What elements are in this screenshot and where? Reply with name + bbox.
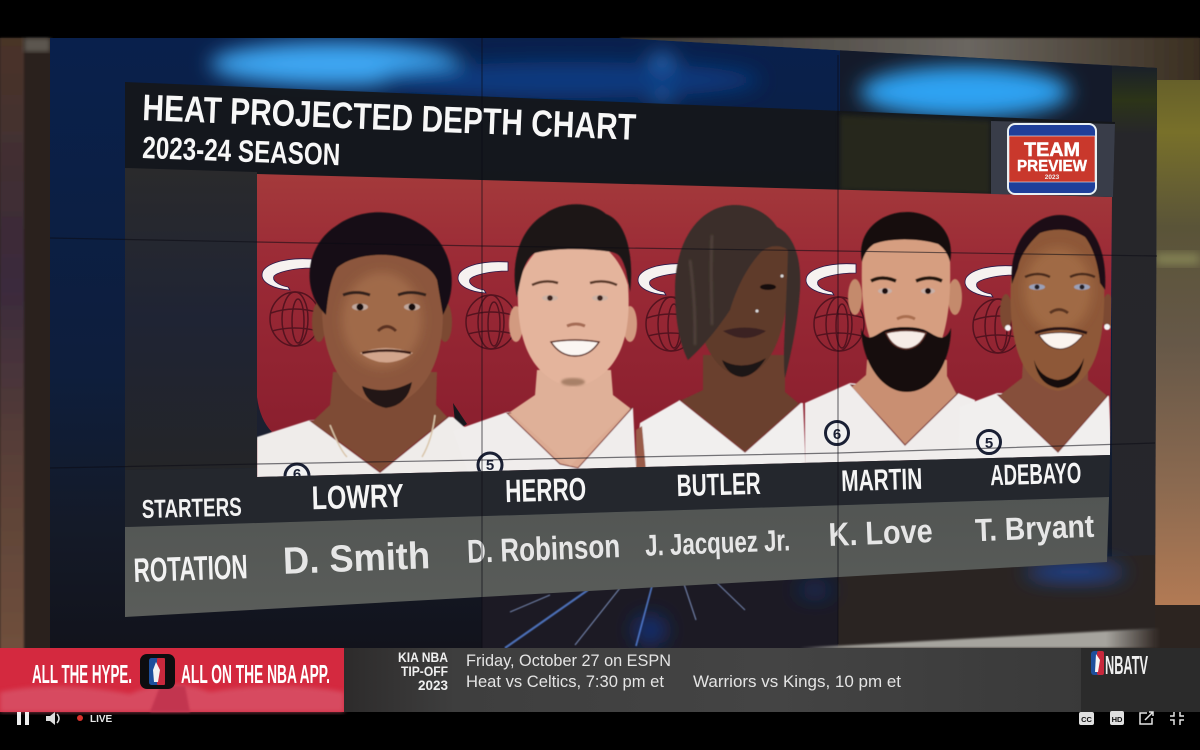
starters band <box>125 455 1110 527</box>
ticker text: Friday, October 27 on ESPN <box>466 651 671 670</box>
icon: pause <box>17 712 29 725</box>
ticker label: 2023 <box>418 677 448 693</box>
left label column <box>125 168 257 470</box>
icon: pop out <box>1140 712 1153 724</box>
badge: team preview <box>991 121 1115 197</box>
row labels <box>133 492 248 590</box>
ticker bar: NBATV <box>1105 650 1148 680</box>
video wall screen <box>50 38 1158 648</box>
ticker label: TIP-OFF <box>401 663 448 679</box>
starter names: BUTLER <box>676 466 761 503</box>
jersey numbers: 5 <box>486 457 494 474</box>
stage lights <box>210 42 1125 644</box>
player: Butler <box>634 205 806 470</box>
row labels: ROTATION <box>133 548 248 590</box>
title: HEAT PROJECTED DEPTH CHART <box>142 87 637 148</box>
floor panels <box>483 578 838 648</box>
jersey numbers <box>284 420 1002 476</box>
jersey numbers: 5 <box>985 435 993 452</box>
starter names <box>311 458 1082 516</box>
live indicator <box>77 714 113 725</box>
player: Martin <box>805 212 975 470</box>
screen seams <box>50 38 1157 648</box>
ticker label <box>398 649 448 693</box>
icon: closed captions: CC <box>1081 715 1092 724</box>
jersey numbers: 6 <box>833 426 841 443</box>
title: 2023-24 SEASON <box>142 130 341 172</box>
rotation names: J. Jacquez Jr. <box>645 524 791 563</box>
header band <box>125 82 1115 197</box>
NBA TV logo <box>1091 650 1148 680</box>
right edge strip <box>1112 60 1158 635</box>
badge: team preview: 2023 <box>1045 174 1060 181</box>
jersey numbers: 6 <box>293 466 301 483</box>
wall highlight under screen <box>800 628 1160 648</box>
player: Herro <box>453 204 637 478</box>
starter names: ADEBAYO <box>990 458 1082 492</box>
panel: depth chart graphic <box>50 38 1157 648</box>
player controls <box>17 711 1184 725</box>
ad banner: NBA app: ALL ON THE NBA APP. <box>181 659 330 689</box>
ad banner: NBA app <box>0 648 344 712</box>
floor rays <box>505 582 745 648</box>
player: Lowry <box>257 212 490 480</box>
ticker text: Heat vs Celtics, 7:30 pm et <box>466 672 664 691</box>
ticker text <box>466 651 901 691</box>
rotation names: K. Love <box>828 512 933 553</box>
rotation names: D. Smith <box>282 535 431 583</box>
ad banner: NBA app: ALL THE HYPE. <box>32 659 132 689</box>
heat logos <box>262 259 1023 353</box>
icon: HD <box>1110 711 1124 725</box>
rotation names: T. Bryant <box>974 508 1095 548</box>
starter names: HERRO <box>505 471 587 509</box>
icon: exit fullscreen <box>1170 712 1184 725</box>
starter names: LOWRY <box>311 477 404 516</box>
icon: closed captions <box>1079 712 1094 725</box>
row labels: STARTERS <box>141 492 242 524</box>
top right dark zone <box>840 50 1157 130</box>
icon: NBA app <box>140 654 175 689</box>
player: Adebayo <box>958 215 1114 470</box>
title <box>142 87 637 172</box>
icon: volume <box>46 712 59 725</box>
player photos <box>257 204 1114 488</box>
rotation names <box>282 508 1095 583</box>
rotation band <box>125 497 1109 617</box>
badge: team preview: TEAM <box>1024 140 1080 161</box>
photo corner shadows <box>257 397 272 440</box>
ticker bar <box>344 648 1200 712</box>
ticker label: KIA NBA <box>398 649 448 665</box>
live indicator: LIVE <box>90 714 113 725</box>
hair <box>675 205 800 378</box>
badge: team preview: PREVIEW <box>1017 158 1088 175</box>
rotation names: D. Robinson <box>466 527 621 570</box>
ticker text: Warriors vs Kings, 10 pm et <box>693 672 901 691</box>
starter names: MARTIN <box>841 463 923 498</box>
player photo background <box>257 174 1112 477</box>
icon: HD: HD <box>1112 715 1123 724</box>
